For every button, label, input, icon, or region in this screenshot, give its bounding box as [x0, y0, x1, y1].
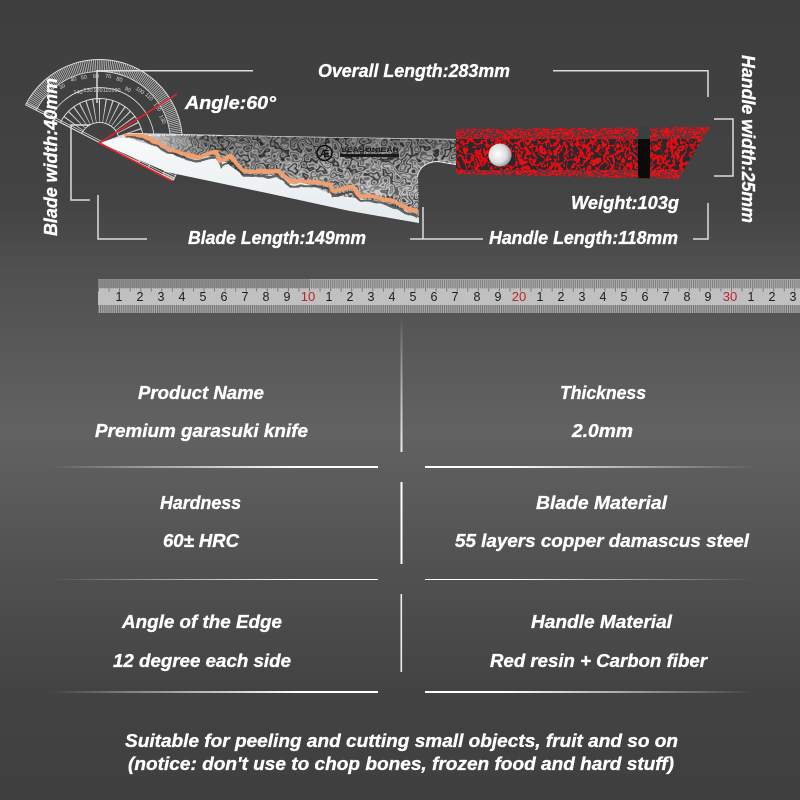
ruler numbers: 4 [389, 290, 396, 304]
ruler numbers: 8 [474, 290, 481, 304]
ruler numbers: 3 [158, 290, 165, 304]
spec: product name [95, 382, 308, 441]
protractor scale numbers: 130 [157, 114, 167, 125]
handle pin [488, 144, 512, 166]
ruler numbers: 7 [452, 290, 459, 304]
copper wave line [124, 134, 417, 212]
damascus steel pattern [100, 130, 460, 225]
carbon fiber and red resin body [455, 125, 713, 181]
spec: thickness: 2.0mm [571, 420, 633, 441]
handle top speckle facet [456, 127, 710, 139]
ruler numbers [116, 289, 797, 304]
blade tip highlight [102, 133, 204, 176]
ruler numbers: 6 [221, 290, 228, 304]
protractor scale numbers: 60 [93, 74, 99, 80]
protractor scale numbers: 120 [152, 102, 162, 113]
ruler numbers: 1 [116, 290, 123, 304]
protractor scale numbers: 30 [58, 83, 67, 91]
spec: product name: Product Name [138, 382, 264, 403]
spec: blade material: 55 layers copper damascus steel [455, 530, 750, 551]
spec: angle of the edge: Angle of the Edge [121, 611, 282, 632]
ruler numbers: 8 [684, 290, 691, 304]
ruler [98, 279, 800, 313]
ruler numbers: 4 [179, 290, 186, 304]
ruler numbers: 6 [431, 290, 438, 304]
protractor scale numbers: 110 [103, 88, 111, 94]
label: blade width: Blade width:40mm [40, 78, 61, 236]
protractor scale numbers: 90 [123, 86, 132, 94]
protractor scale numbers: 50 [80, 75, 87, 81]
ruler numbers: 2 [769, 290, 776, 304]
spec: handle material: Handle Material [531, 611, 673, 632]
ruler numbers: 2 [347, 290, 354, 304]
red angle lines [100, 94, 177, 181]
ruler numbers: 7 [242, 290, 249, 304]
dimension lines [71, 71, 733, 239]
ruler numbers: 7 [663, 290, 670, 304]
spec: hardness: 60± HRC [163, 530, 240, 551]
label: weight: Weight:103g [571, 192, 679, 213]
ruler numbers: 30 [723, 289, 737, 304]
spec: angle of the edge [113, 611, 291, 671]
ruler numbers: 10 [301, 289, 315, 304]
maker logo: SEASONIEAR [341, 147, 399, 154]
protractor scale numbers: 140 [73, 90, 83, 96]
ruler numbers: 5 [621, 290, 628, 304]
spec: hardness [160, 492, 241, 551]
ruler numbers: 20 [512, 289, 526, 304]
protractor scale numbers: 130 [83, 88, 93, 94]
label: blade length: Blade Length:149mm [188, 227, 366, 248]
protractor scale numbers: 100 [134, 86, 145, 96]
polished bevel [101, 137, 419, 223]
spine shading [100, 136, 460, 196]
protractor scale numbers: 120 [93, 88, 103, 94]
spec: hardness: Hardness [160, 492, 241, 513]
spec: blade material [455, 492, 750, 551]
spec: thickness: Thickness [560, 382, 646, 403]
maker logo [317, 146, 399, 160]
table dividers [50, 315, 753, 693]
ruler numbers: 2 [137, 290, 144, 304]
protractor scale numbers: 100 [111, 88, 121, 94]
protractor scale numbers [58, 74, 167, 125]
ruler numbers: 9 [284, 290, 291, 304]
label: angle: Angle:60° [184, 92, 277, 113]
ruler numbers: 9 [495, 290, 502, 304]
spec: handle material [490, 611, 709, 671]
usage note: Suitable for peeling and cutting small objects, fruit and so on [125, 730, 678, 751]
spec: handle material: Red resin + Carbon fiber [490, 650, 709, 671]
protractor scale numbers: 80 [116, 76, 123, 84]
usage note [125, 730, 678, 774]
ruler numbers: 5 [200, 290, 207, 304]
ruler numbers: 3 [579, 290, 586, 304]
spec: product name: Premium garasuki knife [95, 420, 308, 441]
spec: angle of the edge: 12 degree each side [113, 650, 291, 671]
ruler numbers: 4 [600, 290, 607, 304]
maker logo: Æ [320, 149, 330, 160]
icon: protractor [25, 59, 182, 181]
spine highlight [127, 133, 456, 139]
ruler numbers: 2 [558, 290, 565, 304]
label: handle length: Handle Length:118mm [489, 227, 678, 248]
knife blade [101, 133, 456, 223]
ruler numbers: 1 [326, 290, 333, 304]
spec: thickness [560, 382, 646, 441]
ruler numbers: 3 [368, 290, 375, 304]
heel highlight [418, 162, 456, 177]
ruler numbers: 1 [537, 290, 544, 304]
label: handle width: Handle width:25mm [738, 55, 759, 223]
ruler numbers: 6 [642, 290, 649, 304]
ruler numbers: 1 [748, 290, 755, 304]
spacer upper facet [638, 128, 650, 139]
copper wave shadow [126, 137, 417, 216]
ruler numbers: 3 [790, 290, 797, 304]
handle bottom speckle facet [456, 170, 684, 179]
knife handle [455, 125, 713, 181]
protractor scale numbers: 40 [70, 76, 78, 84]
label: overall length: Overall Length:283mm [318, 60, 510, 81]
ruler numbers: 9 [705, 290, 712, 304]
usage note: (notice: don't use to chop bones, frozen food and hard stuff) [128, 753, 674, 774]
protractor scale numbers: 70 [105, 74, 112, 80]
ruler numbers: 5 [410, 290, 417, 304]
spec: blade material: Blade Material [536, 492, 668, 513]
ruler numbers: 8 [263, 290, 270, 304]
black spacer [638, 126, 650, 180]
protractor scale numbers: 110 [143, 92, 154, 103]
